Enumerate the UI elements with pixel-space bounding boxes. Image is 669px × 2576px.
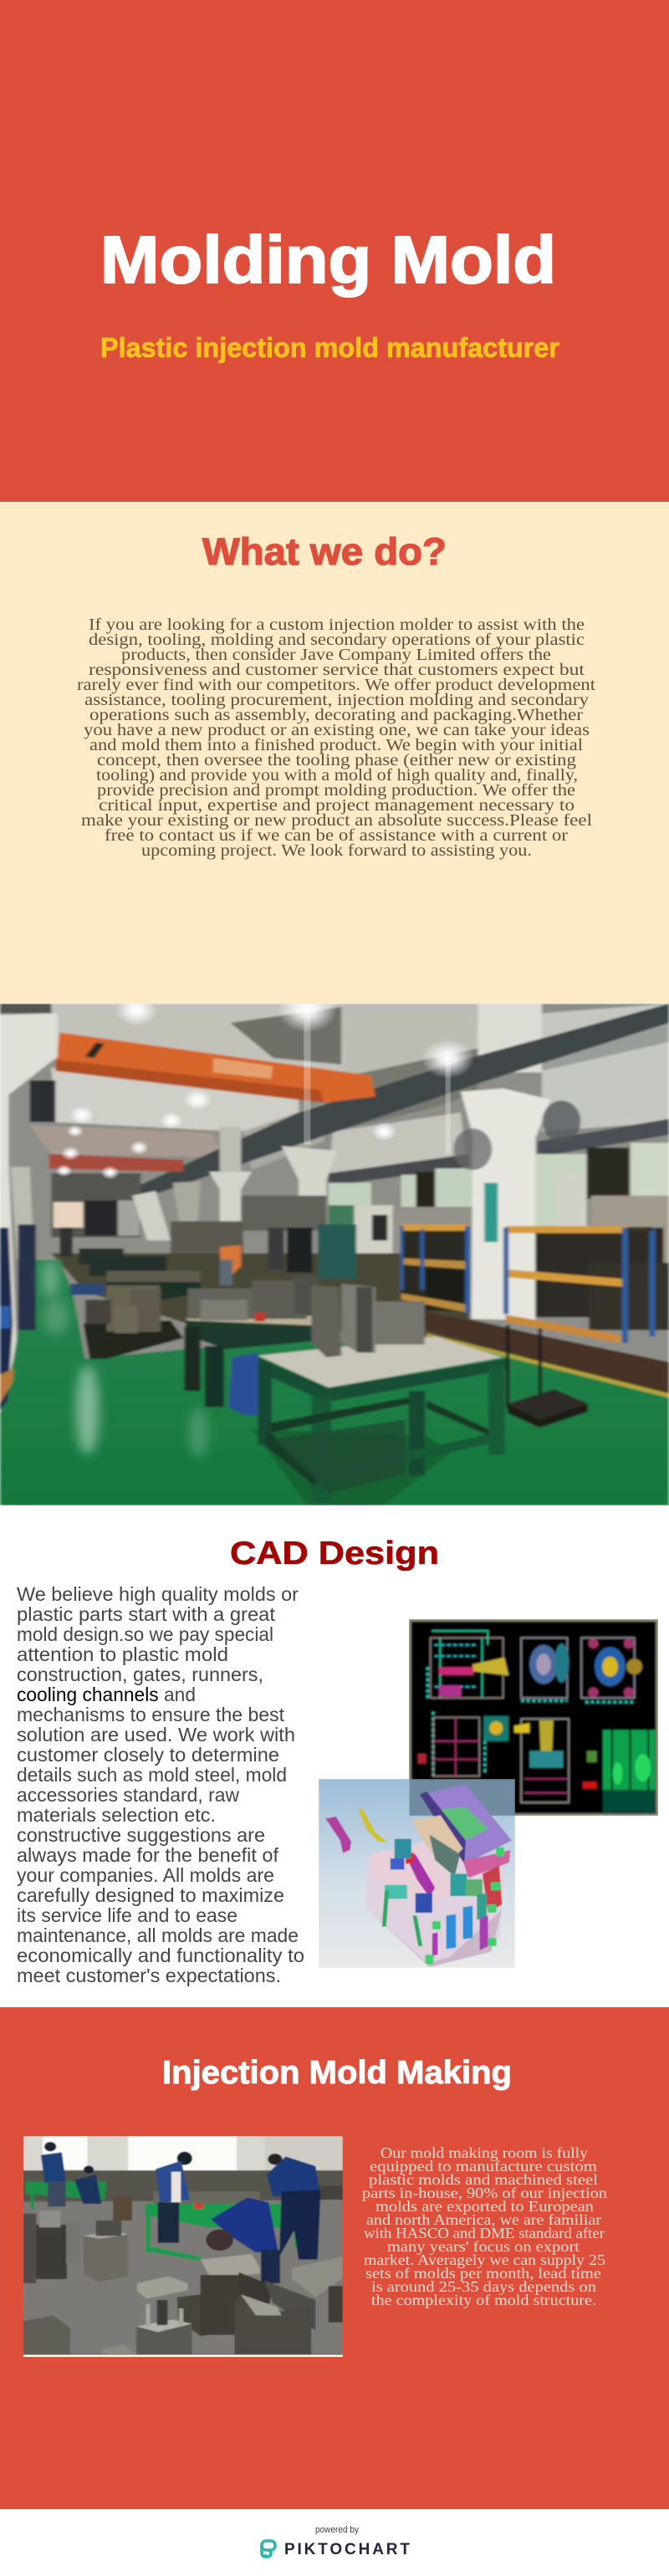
text block: mold making description: is around 25-35 days depends on bbox=[371, 2278, 596, 2295]
text block: company description: If you are looking for a custom injection molder to assist with the bbox=[89, 616, 585, 634]
text block: cad description: meet customer's expectations. bbox=[17, 1965, 281, 1986]
shelves left bbox=[0, 1228, 13, 1410]
text block: mold making description: plastic molds and machined steel bbox=[369, 2171, 598, 2188]
shelves right bbox=[401, 1224, 656, 1343]
panel: what we do bbox=[0, 502, 669, 1004]
text block: cad description: maintenance, all molds are made bbox=[17, 1924, 299, 1946]
cart bbox=[506, 1326, 509, 1408]
wall fans bbox=[453, 1128, 492, 1170]
text block: cad description: materials selection etc. bbox=[17, 1804, 216, 1826]
text block: company description: products, then consider Jave Company Limited offers the bbox=[121, 646, 551, 664]
text block: company description: you have a new product or an existing one, we can take your ideas bbox=[84, 721, 590, 739]
rear wall & machines bbox=[241, 1196, 326, 1231]
heading: injection mold making: Injection Mold Making bbox=[162, 2055, 512, 2091]
subtitle: Plastic injection mold manufacturer bbox=[100, 332, 559, 363]
text block: company description: make your existing or new product an absolute success.Please feel bbox=[81, 811, 593, 830]
text block: cad description: economically and functionality to bbox=[17, 1945, 304, 1966]
front molds bbox=[311, 1285, 341, 1357]
image: 3d mold model bbox=[319, 1779, 515, 1968]
far tables bbox=[79, 1249, 124, 1265]
text block: company description: free to contact us if we can be of assistance with a current or bbox=[105, 826, 568, 845]
duct bbox=[124, 1004, 669, 1202]
text block: company description bbox=[77, 616, 595, 860]
text block: cad description: mechanisms to ensure the best bbox=[17, 1704, 285, 1725]
text block: cad description: construction, gates, runners, bbox=[17, 1664, 263, 1685]
text block: mold making description: parts in-house, 90% of our injection bbox=[362, 2185, 607, 2201]
heading: what we do: What we do? bbox=[202, 530, 447, 573]
text block: cad description: attention to plastic mold bbox=[17, 1643, 228, 1665]
far bay bbox=[51, 1173, 140, 1237]
people bbox=[59, 1228, 73, 1256]
caution stripe bbox=[426, 1333, 669, 1398]
text block: company description: responsiveness and customer service that customers expect but bbox=[89, 661, 585, 679]
text block: cad description: solution are used. We work with bbox=[17, 1724, 295, 1745]
photo: factory floor bbox=[0, 1004, 669, 1505]
text block: company description: and mold them into a finished product. We begin with your initial bbox=[89, 736, 583, 754]
main pillar bbox=[461, 1088, 550, 1321]
text block: mold making description: the complexity of mold structure. bbox=[371, 2292, 596, 2308]
text block: company description: rarely ever find with our competitors. We offer product development bbox=[77, 676, 595, 694]
molds middle bbox=[187, 1289, 252, 1319]
text block: cad description: details such as mold steel, mold bbox=[17, 1764, 287, 1786]
windows right bbox=[535, 1154, 587, 1226]
text block: cad description: carefully designed to maximize bbox=[17, 1884, 284, 1906]
text block: company description: upcoming project. We look forward to assisting you. bbox=[141, 841, 532, 860]
text block: mold making description: and north America, we are familiar bbox=[366, 2211, 601, 2228]
workers bbox=[44, 2142, 56, 2151]
text block: cad description: its service life and to ease bbox=[17, 1904, 237, 1926]
text block: mold making description: molds are exported to European bbox=[375, 2198, 594, 2215]
footer: powered by piktochart bbox=[0, 2509, 669, 2576]
text block: cad description: accessories standard, raw bbox=[17, 1784, 239, 1806]
floor reflections bbox=[43, 1260, 207, 1458]
text block: mold making description: many years' focus on export bbox=[387, 2238, 580, 2255]
stool bbox=[228, 1352, 258, 1415]
text block: company description: concept, then oversee the tooling phase (either new or existing bbox=[97, 751, 576, 769]
image: cad drawing bbox=[409, 1619, 658, 1816]
text block: cad description: customer closely to determine bbox=[17, 1744, 279, 1766]
middle table bbox=[186, 1312, 311, 1331]
left pillar bbox=[0, 1013, 58, 1413]
text block: mold making description: Our mold making room is fully bbox=[380, 2144, 588, 2161]
floor bbox=[0, 1260, 669, 1505]
text block: company description: tooling) and provide you with a mold of high quality and, finally, bbox=[96, 766, 578, 785]
text block: cad description: cooling channels and bbox=[17, 1684, 196, 1705]
text block: mold making description bbox=[362, 2144, 607, 2308]
text block: cad description: mold design.so we pay special bbox=[17, 1623, 273, 1645]
text block: company description: operations such as assembly, decorating and packaging.Whether bbox=[89, 706, 583, 724]
pillars in depth bbox=[132, 1191, 171, 1240]
photo: mold workshop bbox=[23, 2136, 343, 2357]
text block: cad description: constructive suggestions are bbox=[17, 1824, 265, 1846]
front table bbox=[258, 1337, 503, 1388]
text block: company description: provide precision and prompt molding production. We offer the bbox=[97, 781, 575, 800]
text block: company description: design, tooling, molding and secondary operations of your plastic bbox=[89, 631, 585, 649]
icon: piktochart logo bbox=[262, 2541, 275, 2557]
mold blocks bbox=[23, 2214, 36, 2283]
heading: cad design: CAD Design bbox=[230, 1536, 439, 1572]
text block: cad description bbox=[17, 1583, 304, 1986]
text block: mold making description: market. Averagely we can supply 25 bbox=[364, 2251, 605, 2268]
wordmark: PIKTOCHART bbox=[284, 2541, 410, 2558]
text block: mold making description: equipped to manufacture custom bbox=[370, 2158, 597, 2175]
text block: company description: critical input, expertise and project management necessary to bbox=[99, 796, 575, 815]
text block: cad description: plastic parts start with a great bbox=[17, 1603, 276, 1625]
pallet & blocks bbox=[83, 1321, 183, 1359]
text block: cad description: always made for the benefit of bbox=[17, 1844, 279, 1866]
text block: mold making description: with HASCO and DME standard after bbox=[364, 2225, 605, 2241]
powered by label: powered by bbox=[315, 2525, 359, 2535]
ceiling lights bbox=[55, 988, 474, 1179]
panel: cad design bbox=[0, 1505, 669, 2007]
text block: mold making description: sets of molds per month, lead time bbox=[365, 2265, 601, 2282]
title: Molding Mold bbox=[100, 222, 556, 297]
panel: injection mold making bbox=[0, 2007, 669, 2509]
text block: cad description: your companies. All molds are bbox=[17, 1864, 274, 1886]
text block: cad description: We believe high quality molds or bbox=[17, 1583, 299, 1605]
back floor bbox=[51, 1253, 669, 1400]
orange crane bbox=[55, 1032, 375, 1103]
green tables bbox=[26, 2181, 106, 2200]
panel: header bbox=[0, 0, 669, 502]
far crane bbox=[49, 1154, 183, 1172]
text block: company description: assistance, tooling procurement, injection molding and secondary bbox=[84, 691, 589, 709]
